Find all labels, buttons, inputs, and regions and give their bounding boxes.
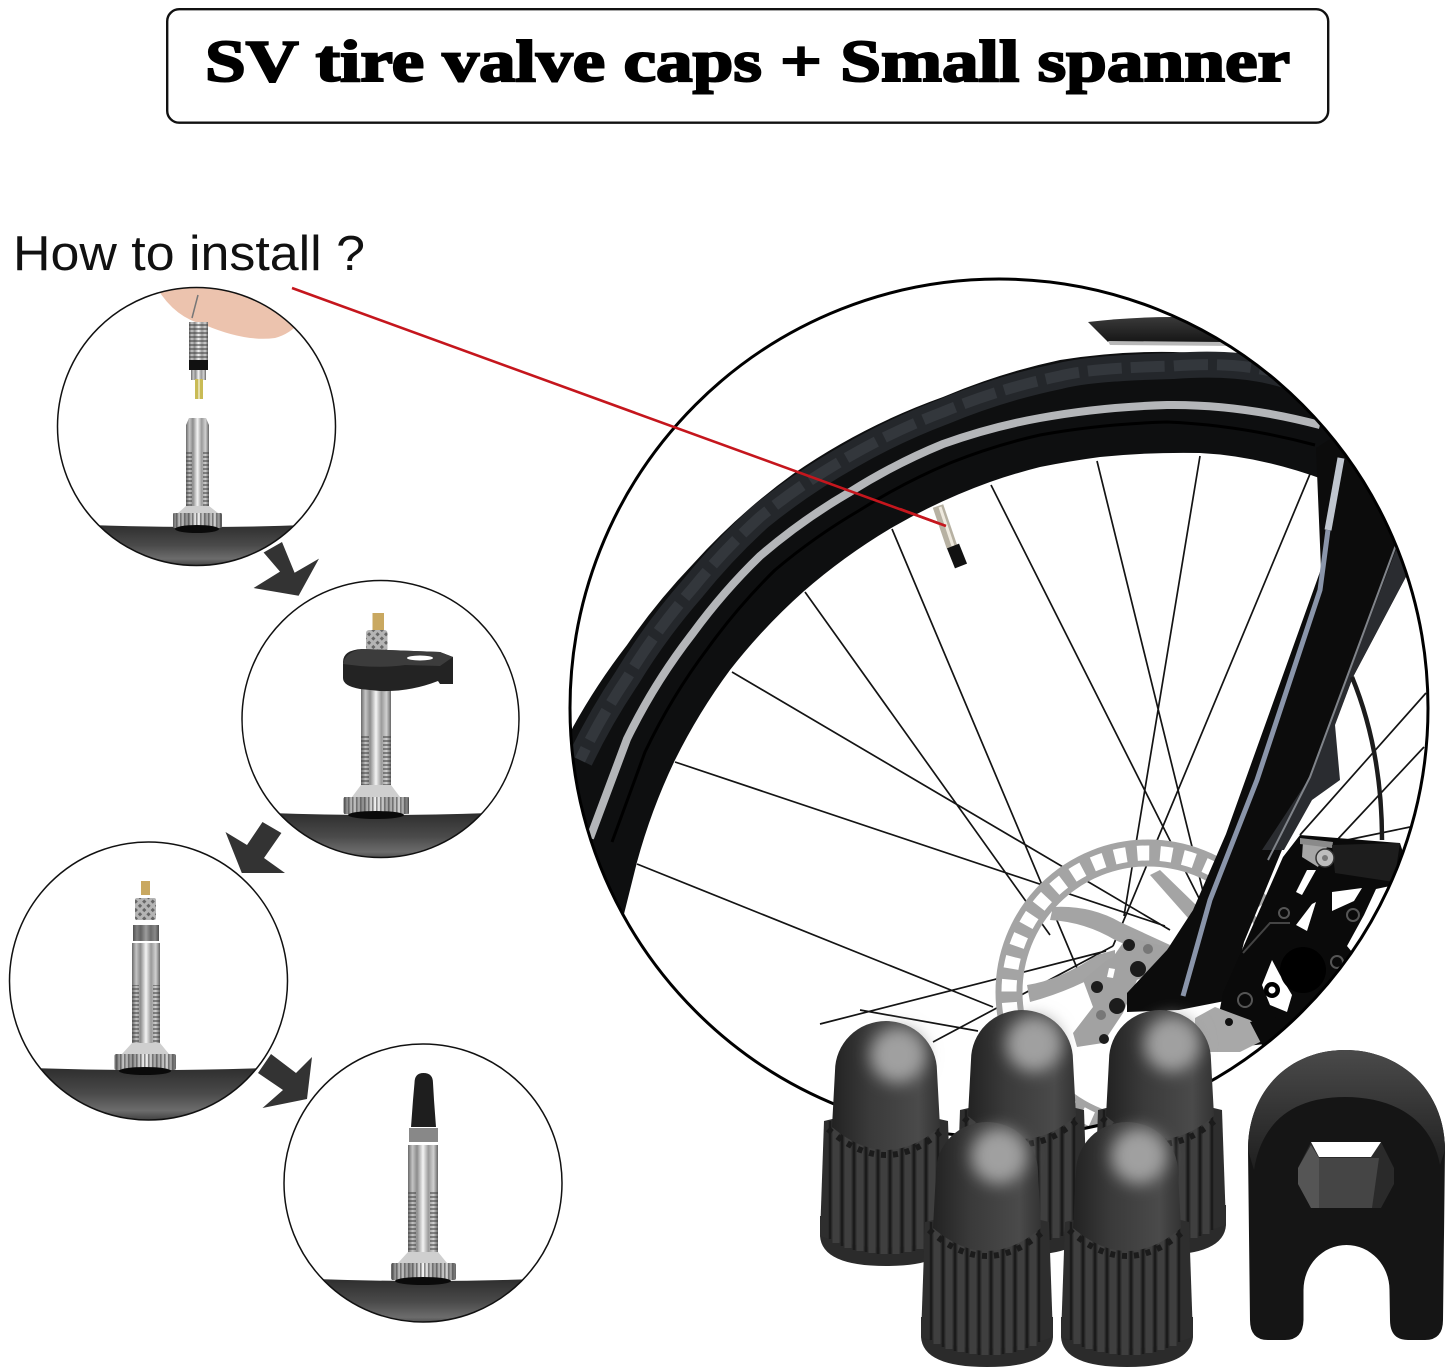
title bbox=[167, 9, 1328, 123]
valve stem bbox=[173, 418, 222, 533]
heading: how to install: How to install ? bbox=[13, 227, 365, 281]
valve caps group bbox=[820, 1010, 1226, 1367]
finger bbox=[160, 288, 294, 339]
panel: step 4 cap fitted bbox=[284, 1044, 562, 1330]
valve core bbox=[189, 295, 208, 399]
title: SV tire valve caps + Small spanner bbox=[205, 28, 1290, 94]
panel: step 1 remove valve core bbox=[58, 280, 336, 570]
valve bbox=[114, 881, 176, 1075]
callout leader line bbox=[292, 288, 946, 526]
tyre bbox=[540, 352, 1345, 930]
small spanner bbox=[1248, 1050, 1445, 1340]
arrow: step 2 to 3 bbox=[226, 822, 285, 873]
fork and brake bbox=[1127, 446, 1406, 1052]
panel: step 3 core reinstalled bbox=[10, 842, 288, 1125]
icon: wheel valve bbox=[900, 506, 961, 566]
brake rotor bbox=[1009, 853, 1287, 1131]
valve stem bbox=[344, 613, 409, 819]
caliper bbox=[1195, 835, 1412, 1052]
valve with cap bbox=[391, 1073, 456, 1285]
spanner bbox=[343, 649, 453, 691]
tube bbox=[100, 525, 294, 565]
panel: bicycle wheel magnified circle bbox=[540, 279, 1450, 1137]
fender bbox=[1088, 317, 1236, 346]
arrow: step 3 to 4 bbox=[258, 1054, 312, 1108]
arrow: step 1 to 2 bbox=[254, 542, 319, 596]
hexagon socket bbox=[1298, 1142, 1394, 1208]
panel: step 2 spanner on core bbox=[242, 580, 519, 865]
spokes bbox=[637, 456, 1426, 1042]
